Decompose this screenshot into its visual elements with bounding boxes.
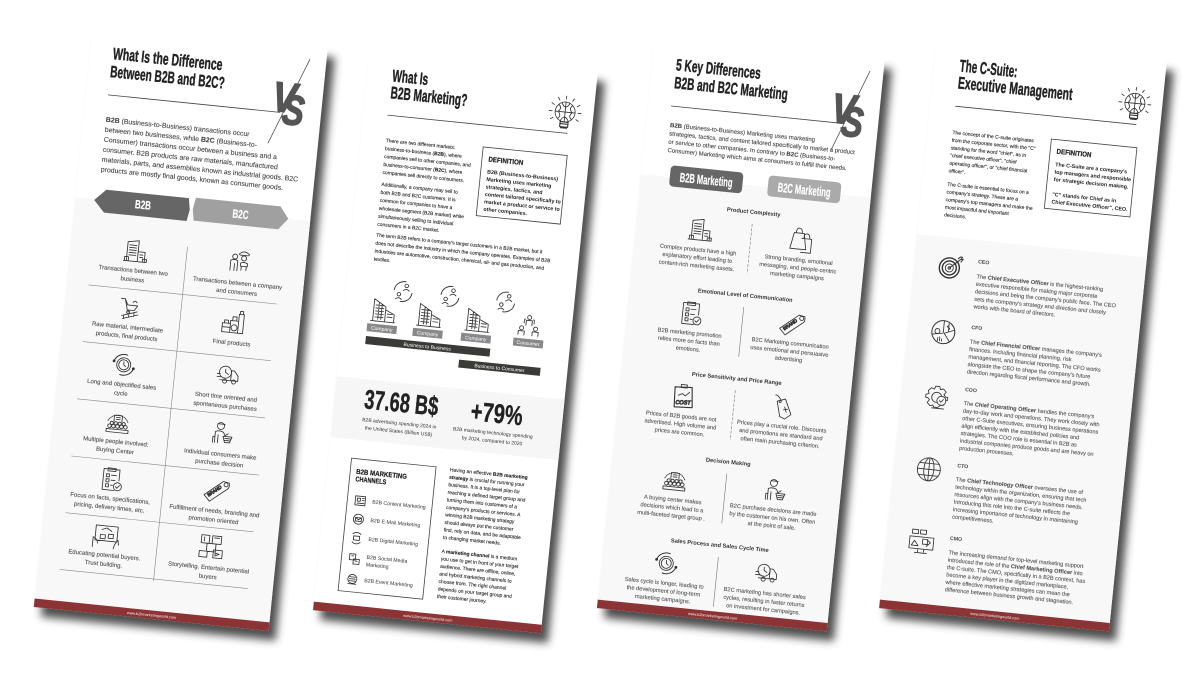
intro text: officer". xyxy=(948,168,966,176)
CFO entry xyxy=(928,320,1104,389)
section: emotional level: Emotional Level of Communication xyxy=(698,288,793,304)
footer band: www.b2bmarketingworld.com xyxy=(403,614,453,623)
CTO entry xyxy=(913,457,1089,534)
intro paragraph: or service to other companies. In contrary to B2C (Business-to- xyxy=(668,140,835,163)
section: product complexity xyxy=(658,201,842,283)
intro text: company's top managers and make the xyxy=(945,197,1033,212)
channel: content: B2B Content Marketing xyxy=(372,500,426,511)
title: B2B Marketing? xyxy=(390,83,468,110)
row 5 right: promotion oriented xyxy=(188,515,239,526)
row 4 left xyxy=(82,412,152,458)
intro text: from the corporate sector, with the "C" xyxy=(951,138,1036,152)
channel: social media xyxy=(349,553,408,572)
definition box: Marketing uses marketing xyxy=(486,177,552,190)
row 3 right: spontaneous purchases xyxy=(193,401,257,413)
section: product complexity: explanatory effort leading to xyxy=(662,252,732,265)
section: emotional level: relies more on facts than xyxy=(657,336,720,348)
row 6 left xyxy=(67,522,144,571)
intro text: most impactful and important xyxy=(945,205,1010,217)
intro text: consumers in a B2C market. xyxy=(377,222,440,234)
row 2 left: Raw material, intermediate xyxy=(92,321,164,335)
channel: event: B2B Event Marketing xyxy=(364,578,413,589)
stat: +79%: +79% xyxy=(469,396,524,431)
B2B to B2C diagram: Business to Business xyxy=(403,342,452,353)
row 5 left xyxy=(69,464,153,515)
section: decision making: A buying center makes xyxy=(644,494,702,506)
VS emblem: S xyxy=(280,86,307,135)
CEO entry xyxy=(935,255,1120,325)
section: decision making: multi-faceted target group . xyxy=(637,510,706,523)
title: Between B2B and B2C? xyxy=(109,63,226,93)
CTO entry: Introducing this role into the C-suite reflects the xyxy=(953,500,1070,517)
COO entry: The Chief Operating Officer handles the company's xyxy=(963,401,1095,420)
intro paragraph: B2B (Business-to-Business) Marketing uses marketing xyxy=(670,123,815,144)
title xyxy=(109,45,227,93)
definition box: market a product or service to xyxy=(484,199,561,213)
B2C marketing button: B2C Marketing xyxy=(777,180,831,200)
VS emblem: V xyxy=(829,84,860,134)
B2B marketing button xyxy=(669,165,744,194)
title: 5 Key Differences xyxy=(675,56,762,83)
section: product complexity: marketing campaigns xyxy=(770,271,824,282)
VS emblem: S xyxy=(839,97,866,146)
strategy text: should always put the customer xyxy=(444,520,514,533)
intro text: business-to-business (B2B), where xyxy=(385,146,462,160)
CMO entry: the C-suite. The CMO, specifically in a B2B context, has xyxy=(947,565,1086,585)
row 1 left xyxy=(97,237,172,287)
page 4: the C-suite xyxy=(878,38,1175,641)
section: decision making: at the point of sale. xyxy=(747,521,796,532)
stat: +79%: by 2024, compared to 2020 xyxy=(461,435,523,447)
strategy text xyxy=(437,467,528,608)
strategy text: A marketing channel is a medium xyxy=(441,549,518,562)
intro text: simultaneously selling to individual xyxy=(378,214,453,227)
section: price sensitivity: Prices play a crucial role. Discounts xyxy=(737,420,827,435)
strategy text: company's products or services. A xyxy=(446,505,521,518)
section: emotional level xyxy=(656,285,834,367)
intro text: does not describe the industry in which the company operates. Examples of B2B xyxy=(375,241,551,264)
row 3 left: Long and objectified sales xyxy=(87,379,156,392)
CFO entry: direction regarding fiscal performance and growth. xyxy=(967,369,1091,388)
B2B to B2C diagram: Consumer xyxy=(516,340,540,348)
footer band xyxy=(597,600,828,631)
intro paragraph: materials, parts, and assemblies known as industrial goods. B2C xyxy=(101,157,298,184)
CFO entry: CFO xyxy=(971,325,983,332)
icon: light bulb brain xyxy=(548,95,583,130)
row 5 left: Focus on facts, specifications, xyxy=(70,492,151,506)
row 2 right xyxy=(212,309,253,349)
COO entry: day-to-day work and operations. They work closely with xyxy=(963,409,1100,428)
CEO entry: works with the board of directors. xyxy=(972,304,1056,319)
definition box: for strategic decision making. xyxy=(1053,177,1129,191)
row 6 right xyxy=(167,532,252,585)
section: product complexity: content-rich marketing assets. xyxy=(658,260,735,273)
row 1 left: Transactions between two xyxy=(98,265,169,278)
intro paragraph: consumer. B2B products are raw materials, manufactured xyxy=(102,147,278,171)
footer band xyxy=(34,599,269,631)
strategy text: reaching a defined target group and xyxy=(447,490,526,504)
section: sales process: on investment for campaigns. xyxy=(726,603,801,617)
strategy text: business. It is a top-level plan for xyxy=(448,482,521,495)
CTO entry: The Chief Technology Officer oversees the use of xyxy=(956,477,1084,496)
intro paragraph: strategies, tactics, and content tailored specifically to market a product xyxy=(669,131,855,156)
channel: content xyxy=(355,496,426,512)
row 2 right: Final products xyxy=(212,339,250,349)
intro text: The C-suite is essential to focus on a xyxy=(947,182,1029,196)
VS emblem xyxy=(827,67,870,153)
intro paragraph: Consumer) Marketing which aims at consumers to fulfill their needs. xyxy=(667,148,847,172)
intro text: The concept of the C-suite originates xyxy=(952,130,1035,144)
stat: +79% xyxy=(452,395,536,448)
footer band: www.b2bmarketingworld.com xyxy=(127,611,176,620)
row 4 left: Buying Center xyxy=(96,446,134,456)
strategy text: Having an effective B2B marketing xyxy=(450,467,528,481)
COO entry xyxy=(920,383,1102,466)
section: price sensitivity xyxy=(643,368,831,451)
section: price sensitivity: often main purchasing criterion. xyxy=(740,436,820,450)
title: Executive Management xyxy=(957,73,1074,104)
stat: 37.68 B$: B2B advertising spending 2024 in xyxy=(362,417,437,431)
stat: +79%: B2B marketing technology spending xyxy=(453,426,533,440)
VS emblem xyxy=(268,56,310,147)
strategy text: audience. There are offline, online, xyxy=(440,564,516,577)
title xyxy=(390,66,470,110)
row 3 left: cycle xyxy=(114,391,128,398)
section: emotional level: advertising xyxy=(774,355,802,364)
row 1 right xyxy=(192,247,285,300)
definition box: DEFINITION xyxy=(488,157,524,167)
definition box: B2B (Business-to-Business) xyxy=(487,169,559,183)
section: emotional level: emotions. xyxy=(675,345,701,354)
channel: social media: Marketing xyxy=(366,562,389,571)
B2C marketing button xyxy=(767,175,842,204)
strategy text: strategy is crucial for running your xyxy=(449,475,525,488)
row 1 left: business xyxy=(120,276,144,284)
COO entry: industrial companies produce goods and are heavy on xyxy=(960,438,1094,458)
B2C banner xyxy=(192,198,289,230)
section: product complexity: messaging, and people-centric xyxy=(759,262,837,276)
section: price sensitivity: and promotions are standard and xyxy=(739,428,823,442)
section: sales process: cycles, resulting in faster returns xyxy=(723,595,805,609)
strategy text: their customer journey. xyxy=(437,594,487,605)
row 4 left: Multiple people involved: xyxy=(83,436,149,449)
intro paragraph: B2B (Business-to-Business) transactions occur xyxy=(105,117,251,138)
B2B to B2C diagram: Business to Consumer xyxy=(474,363,525,374)
row 2 left: products, final products xyxy=(95,331,158,343)
CEO entry: The Chief Executive Officer is the highest-ranking xyxy=(976,274,1103,293)
section: sales process: Sales Process and Sales Cycle Time xyxy=(671,538,769,554)
CTO entry: competitiveness. xyxy=(952,514,994,525)
intro text: common for companies to have a xyxy=(379,198,453,211)
row 5 left: pricing, delivery times, etc. xyxy=(74,502,145,515)
strategy text: depends on your target group and xyxy=(437,586,512,600)
VS emblem: V xyxy=(270,73,301,122)
channels box: B2B MARKETING xyxy=(356,469,408,481)
title xyxy=(673,56,790,104)
row 6 left: Trust building. xyxy=(84,560,123,570)
row 1 right: and consumers xyxy=(216,288,257,298)
COO entry: production processes. xyxy=(959,446,1014,457)
CEO entry: CEO xyxy=(978,259,990,266)
section: price sensitivity: Price Sensitivity and Price Range xyxy=(692,372,782,387)
section: emotional level: B2B marketing promotion xyxy=(657,327,722,340)
stat: 37.68 B$: the United States (Billion US$) xyxy=(365,425,433,438)
B2B to B2C diagram: Company xyxy=(465,335,487,343)
B2B banner xyxy=(93,189,191,221)
channel: e-mail xyxy=(353,514,421,531)
definition box: top managers and responsible xyxy=(1054,170,1131,183)
section: decision making xyxy=(637,451,821,534)
stat: 37.68 B$: 37.68 B$ xyxy=(363,384,440,422)
intro text: both B2B and B2C customers. It is xyxy=(380,190,456,203)
definition box: The C-Suite are a company's xyxy=(1055,162,1127,175)
row 3 right: Short time oriented and xyxy=(195,392,257,404)
row 4 right: purchase decision xyxy=(195,459,244,469)
footer band xyxy=(879,600,1110,631)
section: decision making: by the customer on his own. Often xyxy=(729,511,816,526)
CFO entry: finances. Including financial planning, risk xyxy=(969,347,1072,363)
channels box: CHANNELS xyxy=(355,476,387,486)
B2B to B2C diagram xyxy=(364,278,548,376)
strategy text: and hybrid marketing channels to xyxy=(439,571,512,585)
CFO entry: alongside the CEO to shape the company's future xyxy=(967,362,1091,380)
intro text xyxy=(944,130,1040,227)
COO entry: align efficiently with the established policies and xyxy=(961,423,1079,441)
footer band xyxy=(313,602,542,633)
definition box: Chief Executive Officer", CEO. xyxy=(1051,199,1128,213)
intro paragraph xyxy=(100,117,302,193)
intro text: Additionally, a company may sell to xyxy=(381,182,458,196)
intro paragraph: Consumer) transactions occur between a business and a xyxy=(103,137,277,161)
section: sales process: marketing campaigns. xyxy=(635,594,691,605)
strategy text: to changing market needs. xyxy=(443,535,501,547)
B2B marketing button: B2B Marketing xyxy=(679,170,733,190)
CTO entry: technology within the organization, ensuring that tech xyxy=(955,485,1087,504)
intro text: operating officer", or "chief financial xyxy=(949,161,1028,174)
intro paragraph xyxy=(667,123,856,173)
row 1 right: Transactions between a company xyxy=(193,276,282,291)
CEO entry: sets the company's strategy and direction and closely xyxy=(974,297,1106,316)
strategy text: turning them into customers of a xyxy=(446,497,518,510)
section: sales process: B2C marketing has shorter sales xyxy=(723,587,806,601)
section: sales process: the development of long-term xyxy=(626,585,701,598)
title xyxy=(957,56,1075,104)
definition box: strategies, tactics, and xyxy=(485,184,543,196)
CMO entry xyxy=(905,529,1089,607)
row 2 left xyxy=(91,296,167,344)
B2B to B2C diagram: Company xyxy=(371,326,393,334)
COO entry: other C-Suite executives, ensuring business operations xyxy=(962,416,1099,436)
channel: social media: B2B Social Media xyxy=(366,555,408,565)
section: emotional level: uses emotional and persuasive xyxy=(750,345,829,359)
COO entry: strategies. The COO role is essential in B2B as xyxy=(960,431,1077,449)
definition box: DEFINITION xyxy=(1056,149,1092,159)
CFO entry: The Chief Financial Officer manages the company's xyxy=(970,339,1102,359)
CTO entry: CTO xyxy=(957,463,968,470)
row 4 right xyxy=(183,419,260,471)
COO entry: COO xyxy=(965,387,977,394)
B2B to B2C diagram: Company xyxy=(417,330,439,338)
CFO entry: management, and financial reporting. The CFO works xyxy=(968,354,1101,374)
row 3 right xyxy=(193,363,261,413)
row 5 right xyxy=(168,476,262,528)
section: decision making: decisions which lead to a xyxy=(640,502,704,515)
channel: digital: B2B Digital Marketing xyxy=(368,537,418,548)
CMO entry: The increasing demand for top-level marketing support xyxy=(948,550,1084,570)
title: B2B and B2C Marketing xyxy=(673,74,789,104)
definition box: content tailored specifically to xyxy=(485,192,562,206)
intro text: standing for the word "chief", as in xyxy=(951,145,1027,159)
B2B banner: B2B xyxy=(134,197,152,213)
channel: event xyxy=(347,574,413,590)
page 3: 5 key differences xyxy=(596,36,893,641)
intro text: industries are automotive, construction, chemical, oil- and gas production, and xyxy=(374,249,545,272)
section: emotional level: B2C Marketing communication xyxy=(751,337,829,351)
icon: light bulb brain xyxy=(1117,86,1152,121)
intro text: "chief executive officer", "chief xyxy=(950,153,1017,166)
section: decision making: Decision Making xyxy=(706,458,751,468)
B2C banner: B2C xyxy=(232,207,249,222)
intro text: There are two different markets: xyxy=(385,138,456,151)
strategy text: you use to get in front of your target xyxy=(440,556,519,570)
strategy text: choose from. The right channel xyxy=(438,579,506,592)
section: product complexity: Strong branding, emotional xyxy=(764,254,833,267)
CEO entry: decisions and being the company's public face. The CEO xyxy=(975,289,1117,309)
section: product complexity: Complex products have a high xyxy=(660,244,737,257)
section: sales process: Sales cycle is longer, leading to xyxy=(624,577,704,591)
channel: e-mail: B2B E-Mail Marketing xyxy=(370,518,421,529)
channel: digital xyxy=(352,532,419,550)
page 2: what is B2B marketing xyxy=(312,49,606,643)
CMO entry: introduced the role of the Chief Marketing Officer into xyxy=(947,558,1083,577)
section: sales process xyxy=(623,534,811,617)
section: product complexity: Product Complexity xyxy=(727,207,781,219)
intro text: companies sell directly to consumers. xyxy=(382,170,464,184)
intro text: wholesale segment (B2B market) while xyxy=(379,206,464,220)
definition box xyxy=(476,147,567,224)
definition box: "C" stands for Chief as in xyxy=(1052,192,1116,204)
intro text: business-to-consumer (B2C), where xyxy=(383,162,463,176)
CMO entry: where effective marketing strategies can mean the xyxy=(944,580,1070,598)
CMO entry: difference between business growth and stagnation. xyxy=(944,587,1074,606)
intro text: company's strategy. These are a xyxy=(946,189,1019,203)
title: What Is xyxy=(391,66,429,89)
section: decision making: B2C purchase decisions are made xyxy=(730,503,817,518)
title: The C-Suite: xyxy=(959,56,1018,81)
section: price sensitivity: prices are common. xyxy=(654,427,705,438)
intro text: The term B2B refers to a company's target customers in a B2B market, but it xyxy=(376,233,543,256)
CMO entry: CMO xyxy=(950,536,962,543)
stat: 37.68 B$ xyxy=(361,384,440,439)
CTO entry: increasing importance of technology in maintaining xyxy=(953,507,1078,526)
row 6 right: Storytelling. Entertain potential xyxy=(168,561,249,576)
channels box xyxy=(338,458,436,599)
footer band: www.b2bmarketingworld.com xyxy=(688,612,737,621)
definition box xyxy=(1044,139,1137,217)
strategy text: winning B2B marketing strategy xyxy=(445,512,515,525)
row 6 right: buyers xyxy=(198,574,217,581)
section: price sensitivity: Prices of B2B goods are not xyxy=(646,410,717,424)
intro text: companies sell to other companies, and xyxy=(384,154,471,169)
footer band: www.b2bmarketingworld.com xyxy=(970,612,1020,621)
row 3 left xyxy=(86,351,159,401)
row 5 right: Fulfillment of needs, branding and xyxy=(169,504,260,519)
CMO entry: become a key player in the digitized marketplace, xyxy=(946,572,1069,591)
strategy text: first, rely on data, and be adaptable xyxy=(443,527,521,541)
row 6 left: Educating potential buyers. xyxy=(68,549,141,563)
intro text: decisions. xyxy=(944,212,967,221)
intro paragraph: between two businesses, while B2C (Business-to- xyxy=(104,127,257,149)
page 1: difference between B2B and B2C xyxy=(33,24,336,641)
intro text xyxy=(373,138,562,280)
intro paragraph: products are mostly final goods, known as consumer goods. xyxy=(100,167,283,192)
CEO entry: executive responsible for making major corporate xyxy=(975,282,1098,300)
definition box: other companies. xyxy=(483,207,528,217)
CTO entry: resources align with the company's business needs. xyxy=(954,492,1083,511)
title: What Is the Difference xyxy=(112,45,223,74)
row 4 right: Individual consumers make xyxy=(184,448,257,462)
intro text: textiles. xyxy=(373,256,391,264)
section: price sensitivity: advertised. High volume and xyxy=(644,418,716,432)
